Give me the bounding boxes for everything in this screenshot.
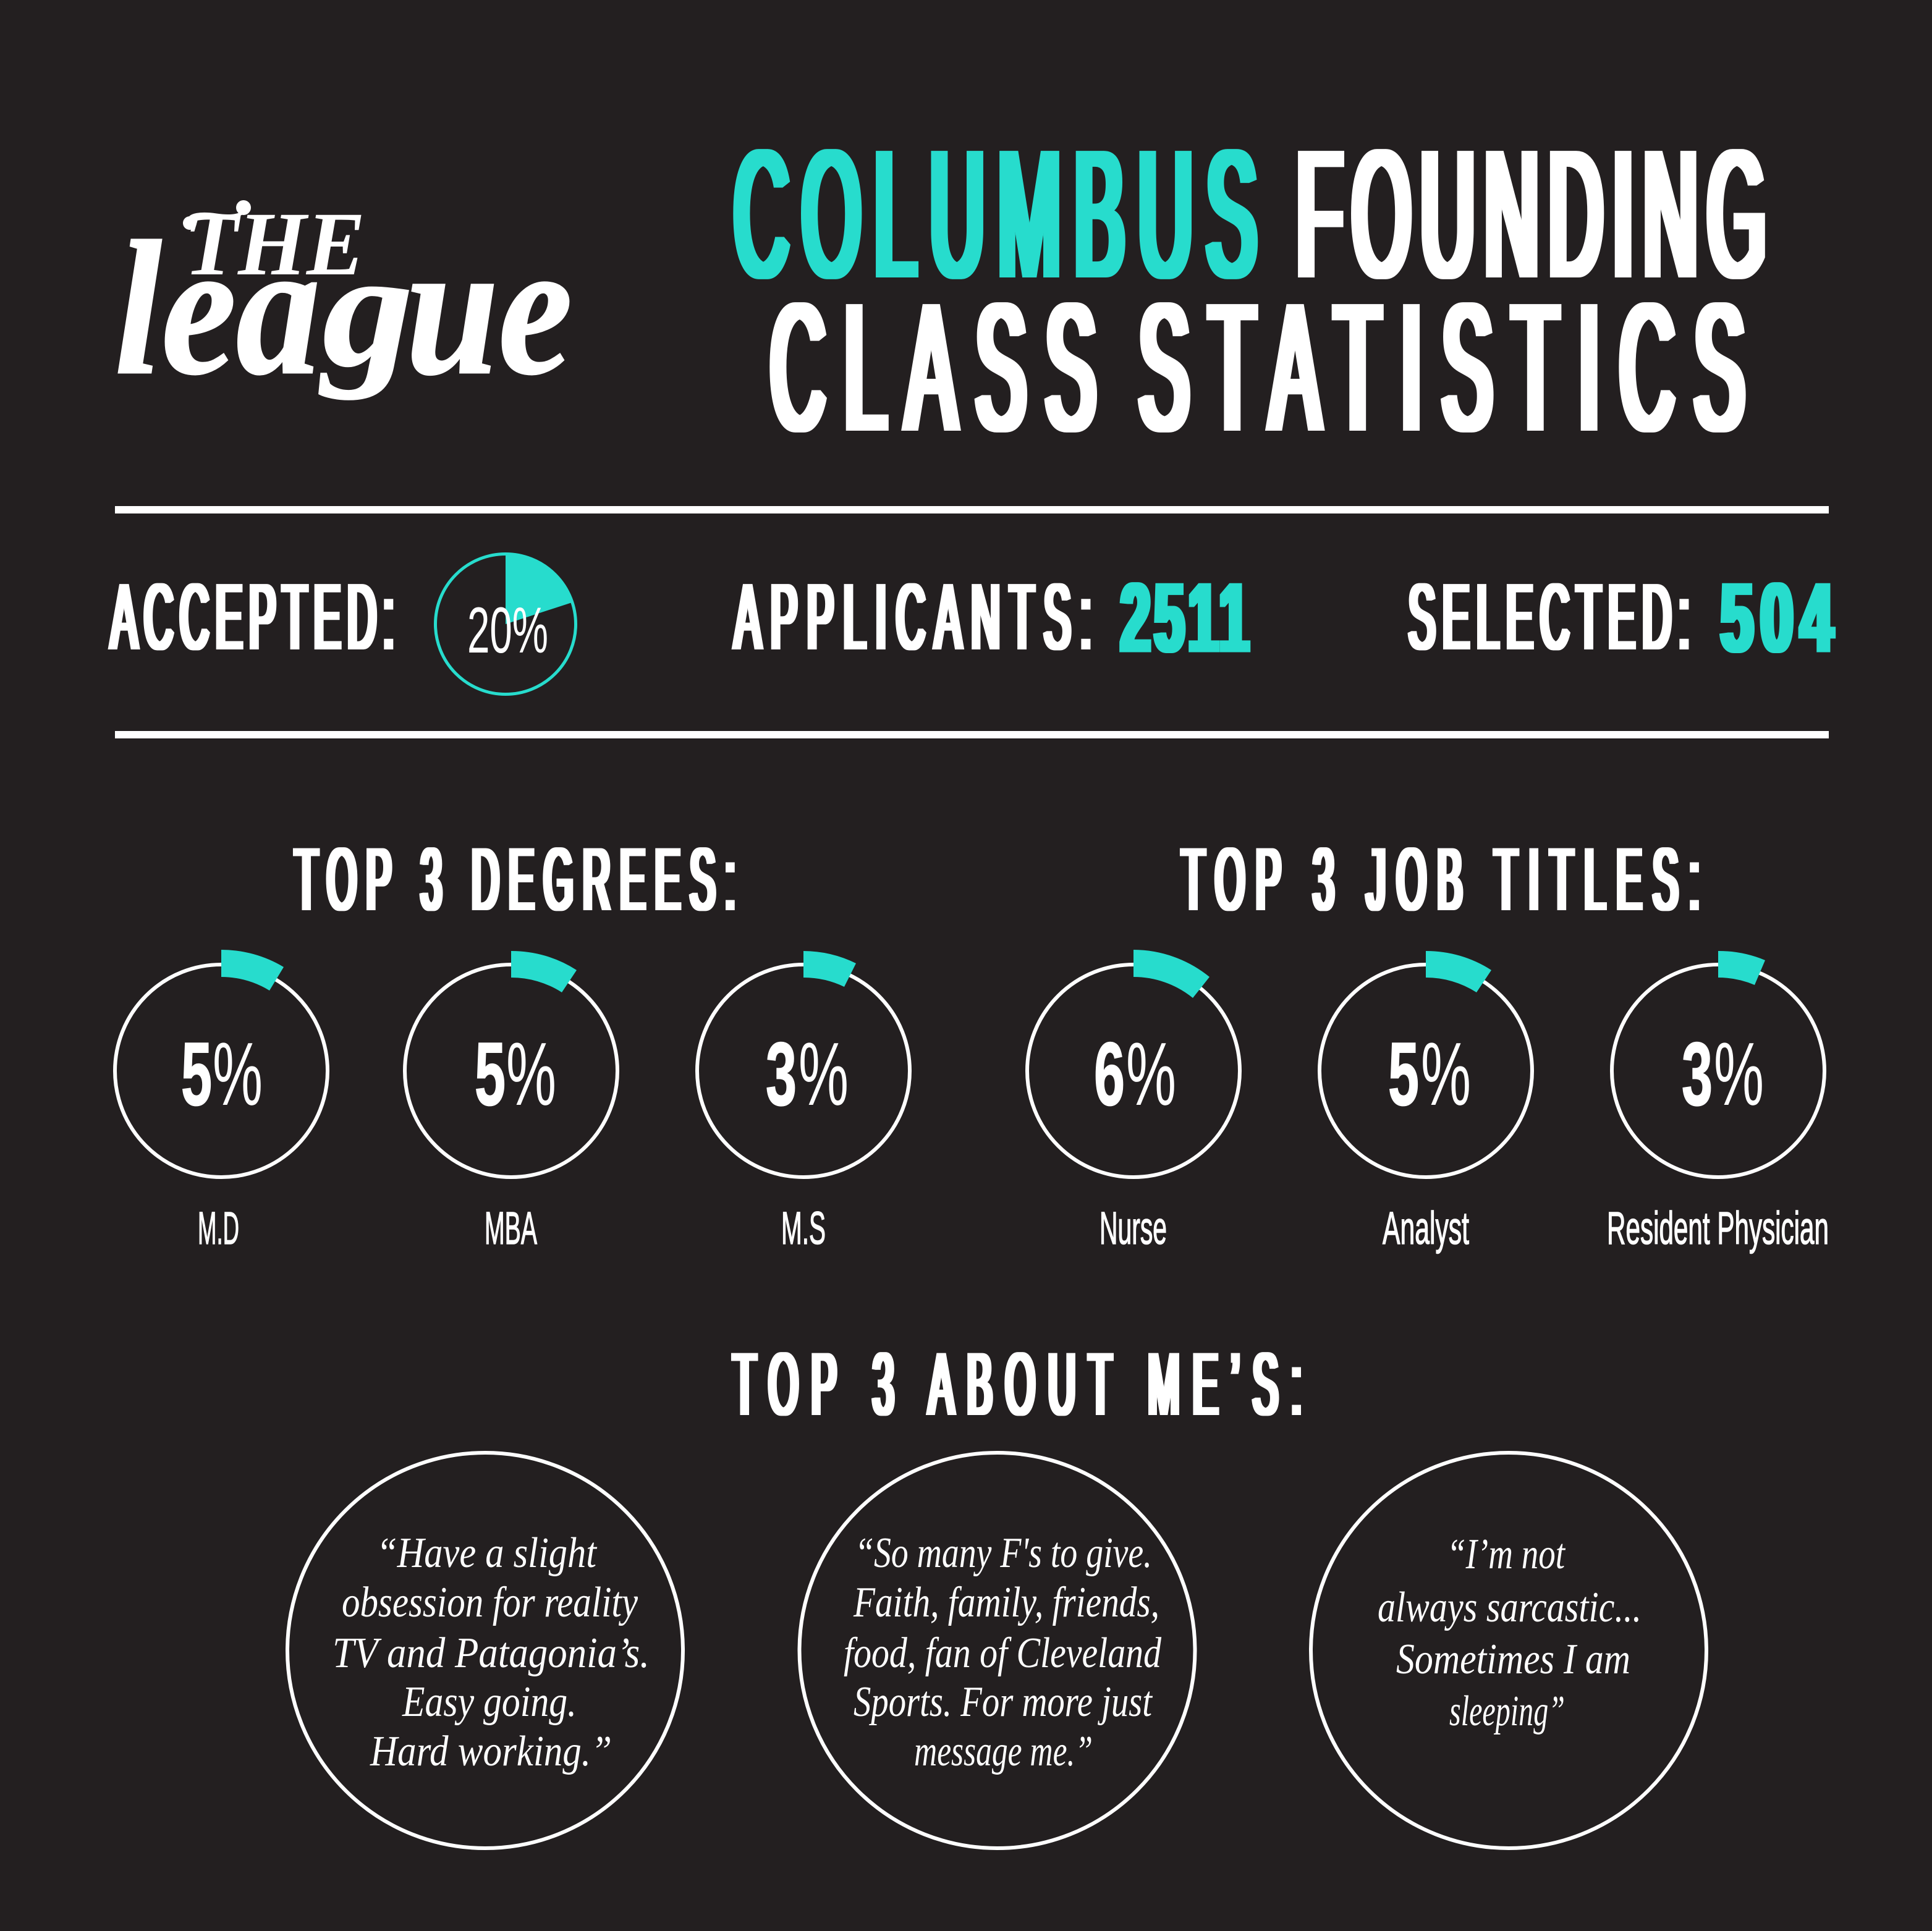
quote circle 2: Sports. For more just (854, 1678, 1153, 1726)
gauge: M.S 3%: M.S (781, 1202, 826, 1254)
quote circle 2: food, fan of Cleveland (844, 1629, 1162, 1677)
logo: The League: g (317, 219, 413, 400)
quote circle 3 (1311, 1453, 1706, 1848)
title: COLUMBUS (734, 114, 1256, 315)
selected: 504 (1721, 563, 1833, 672)
heading: degrees: TOP 3 DEGREES: (295, 830, 735, 929)
quote circle 2: “So many F's to give. (855, 1529, 1152, 1577)
applicants (734, 564, 1249, 673)
gauge: Nurse 6%: % (1126, 1024, 1176, 1124)
accepted label: ACCEPTED: (111, 565, 394, 669)
gauge: M.D 5%: % (213, 1024, 263, 1124)
gauge: Resident Physician 3%: 3 (1682, 1024, 1713, 1124)
gauge: M.D 5%: M.D (198, 1202, 239, 1254)
logo: The League: THE (184, 193, 365, 294)
quote circle 1: Hard working.” (370, 1728, 612, 1775)
quote circle 2: Faith, family, friends, (853, 1579, 1159, 1626)
title: STATISTICS (1139, 267, 1744, 468)
title: CLASS (771, 267, 1096, 468)
gauge: Nurse 6%: 6 (1094, 1024, 1125, 1124)
quote circle 2: message me.” (914, 1728, 1093, 1775)
gauge: Resident Physician 3% (1607, 951, 1829, 1254)
gauge: MBA 5% (405, 951, 617, 1254)
gauge: Analyst 5%: % (1421, 1024, 1471, 1124)
pie chart: 20 percent accepted (435, 554, 576, 695)
applicants: APPLICANTS: (734, 565, 1091, 669)
panel: top 3 about me's (287, 1335, 1706, 1848)
gauge: Resident Physician 3%: % (1714, 1024, 1764, 1124)
gauge: M.S 3%: 3 (766, 1024, 797, 1124)
quote circle 1: obsession for reality (342, 1579, 638, 1626)
gauge: MBA 5%: MBA (485, 1202, 537, 1254)
gauge: M.S 3% (697, 951, 910, 1254)
gauge: Analyst 5% (1320, 951, 1532, 1254)
gauge: M.S 3%: % (799, 1024, 849, 1124)
quote circle 1: “Have a slight (376, 1529, 597, 1577)
title: FOUNDING (1297, 114, 1766, 315)
quote circle 3: always sarcastic... (1378, 1584, 1642, 1631)
gauge: M.D 5% (115, 950, 328, 1254)
applicants: 2511 (1121, 564, 1249, 673)
logo: The League: ue (406, 203, 572, 415)
gauge: MBA 5%: % (506, 1024, 556, 1124)
stats row (111, 554, 1833, 695)
gauge: MBA 5%: 5 (475, 1024, 506, 1124)
quote circle 1: Easy going. (402, 1678, 577, 1726)
quote circle 2 (800, 1453, 1195, 1848)
gauge: Analyst 5%: 5 (1388, 1024, 1419, 1124)
selected (1409, 563, 1833, 672)
title (734, 114, 1766, 468)
panel: top 3 job titles (1027, 830, 1829, 1254)
gauge: Nurse 6% (1027, 950, 1240, 1254)
logo: The League (115, 193, 572, 415)
quote circle 1: TV and Patagonia’s. (333, 1629, 650, 1677)
quote circle 3: Sometimes I am (1396, 1636, 1630, 1683)
gauge: Nurse 6%: Nurse (1099, 1202, 1167, 1254)
quote circle 1 (287, 1453, 683, 1848)
selected: SELECTED: (1409, 565, 1690, 669)
heading: about me's: TOP 3 ABOUT ME’S: (733, 1335, 1302, 1434)
gauge: M.D 5%: 5 (181, 1024, 212, 1124)
quote circle 3: “I’m not (1447, 1531, 1566, 1578)
gauge: Analyst 5%: Analyst (1383, 1202, 1469, 1254)
heading: job titles: TOP 3 JOB TITLES: (1182, 830, 1700, 929)
logo: The League: lea (115, 203, 320, 415)
panel: top 3 degrees (115, 830, 910, 1254)
quote circle 3: sleeping” (1449, 1688, 1565, 1735)
pie chart: 20 percent accepted: 20% (467, 594, 548, 667)
